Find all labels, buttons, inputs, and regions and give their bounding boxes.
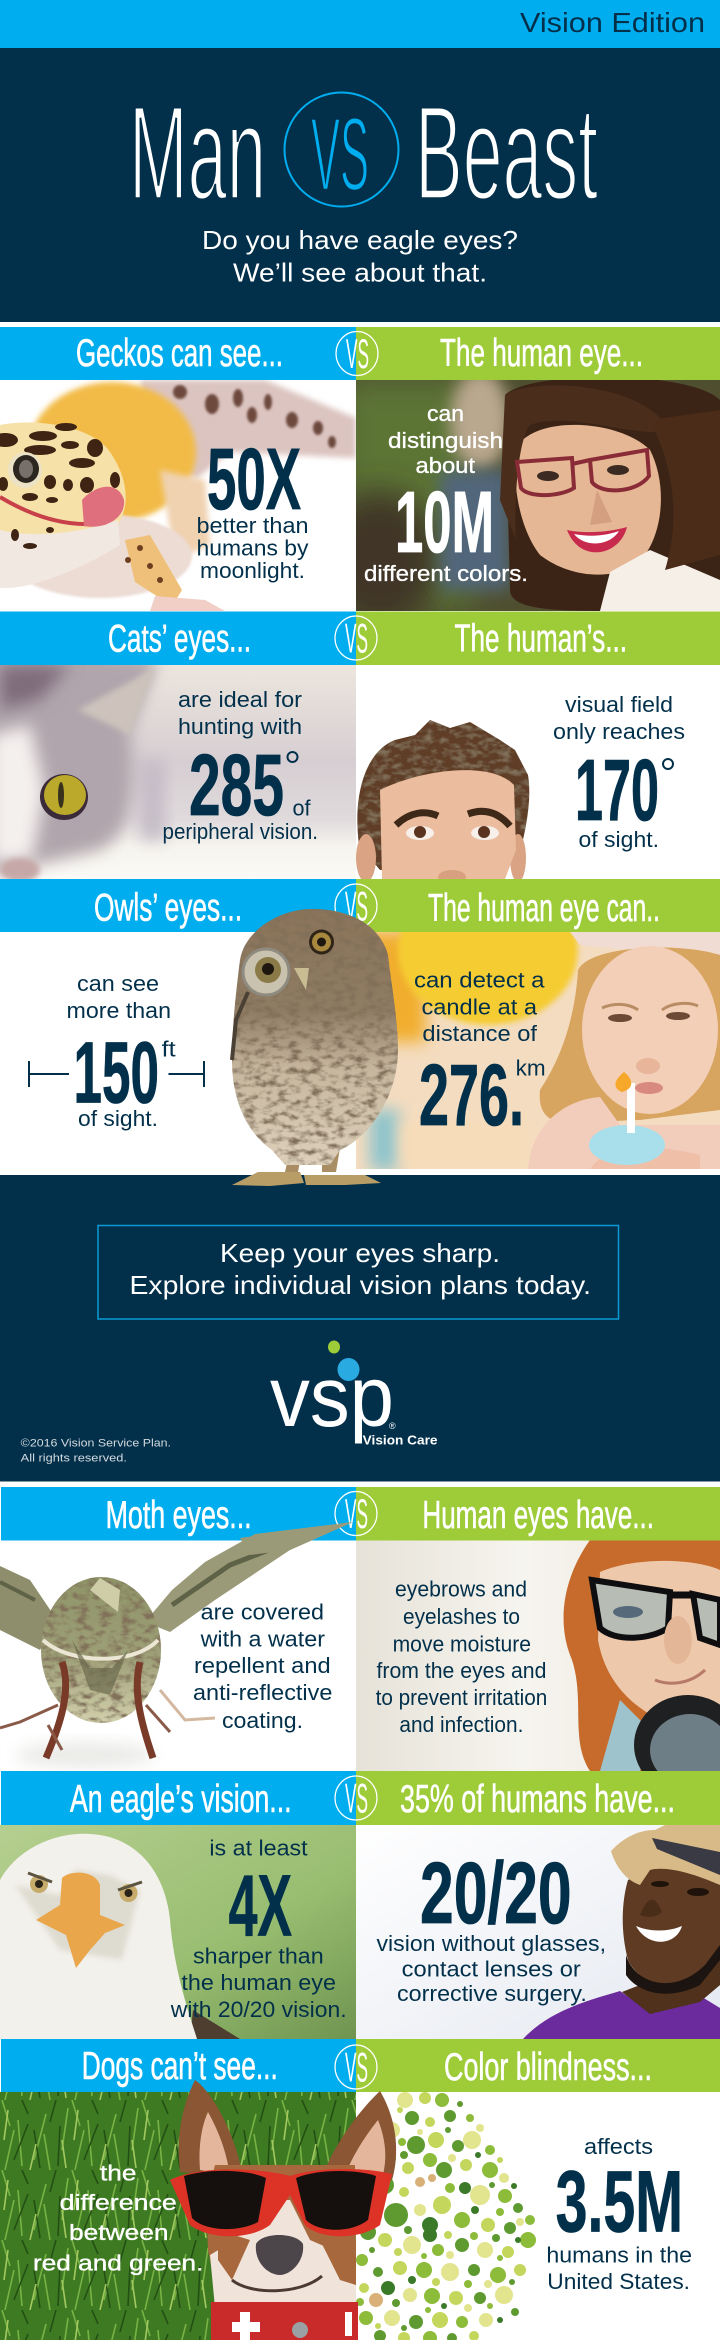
caption: human colour top: distinguish (388, 428, 503, 453)
header: dogs (1, 2039, 356, 2092)
illustration: woman with glasses (356, 380, 720, 611)
caption: eyebrows: eyebrows and (395, 1577, 527, 1602)
caption: 20/20: contact lenses or (402, 1956, 581, 1981)
stat: 285 degrees: 285 (189, 737, 284, 834)
logo: VSP: ® (389, 1421, 396, 1431)
stat: 276 km: 276. (419, 1047, 524, 1144)
caption: moth (193, 1600, 332, 1733)
vs badges (335, 330, 378, 2090)
caption: 20/20 (376, 1931, 606, 2006)
logo: VSP: Vision Care (363, 1432, 438, 1447)
caption: gecko (196, 513, 308, 583)
header: human eyes have (356, 1487, 720, 1540)
header: eagle: An eagle’s vision... (70, 1778, 292, 1821)
caption: 20/20: corrective surgery. (397, 1981, 587, 2006)
caption: human top: only reaches (553, 719, 685, 744)
header: owls: Owls’ eyes... (94, 887, 242, 930)
subtitle: Do you have eagle eyes? (202, 225, 518, 255)
caption: eagle top: is at least (209, 1835, 308, 1860)
header: human's: The human’s... (454, 618, 627, 661)
caption: human colour top (388, 401, 503, 478)
panel: human candle fact (356, 875, 720, 1170)
top bar (0, 0, 720, 48)
caption: dog: between (69, 2220, 168, 2245)
panel: call to action (0, 1175, 720, 1482)
caption: human top: visual field (565, 692, 673, 717)
caption: eyebrows: and infection. (399, 1712, 523, 1737)
caption: different colors: different colors. (364, 561, 528, 586)
caption: moth: anti-reflective (193, 1680, 332, 1705)
caption: eyebrows: from the eyes and (376, 1658, 546, 1683)
caption: gecko: humans by (196, 536, 308, 560)
vs badges: VS (346, 330, 369, 377)
callout box: Keep your eyes sharp. (220, 1238, 500, 1268)
stat: 4X: 4X (229, 1858, 292, 1955)
illustration: eagle (0, 1825, 356, 2039)
caption: affects: affects (584, 2134, 653, 2159)
caption: gecko: better than (196, 513, 308, 538)
stat: 20/20: 20/20 (420, 1845, 572, 1942)
caption: candle: candle at a (422, 994, 538, 1020)
illustration: cat (0, 650, 356, 882)
panel: human colour vision (356, 327, 720, 611)
caption: eagle bottom (170, 1944, 347, 2022)
illustration: man looking up (356, 720, 530, 879)
caption: humans in US (546, 2242, 692, 2294)
title: Man: Man (129, 79, 266, 228)
caption: humans in US: humans in the (546, 2242, 692, 2267)
header: owls (0, 879, 356, 932)
vs badges: VS (345, 614, 368, 662)
callout box: Explore individual vision plans today. (130, 1270, 591, 1300)
header: human's (356, 612, 720, 665)
caption: dog: red and green. (33, 2250, 203, 2276)
stat: 170 degrees: 170 (575, 742, 659, 839)
panel: moth facts (0, 1487, 356, 1767)
caption: owl bottom: of sight. (78, 1106, 158, 1131)
stat: 276 km: km (516, 1056, 546, 1081)
panel: color blindness fact (356, 2039, 720, 2340)
caption: cat top (178, 687, 302, 739)
caption: moth: coating. (222, 1708, 303, 1733)
caption: cat top: are ideal for (178, 687, 302, 712)
illustration: owl with monocle (232, 909, 398, 1186)
panel: owl facts (0, 879, 356, 1131)
caption: eyebrows (376, 1577, 547, 1737)
panel: 20/20 fact (356, 1771, 720, 2039)
caption: eyebrows: to prevent irritation (376, 1685, 547, 1710)
logo: VSP: vsp (270, 1350, 394, 1445)
stat: 10M: 10M (395, 474, 494, 571)
vs badges: VS (345, 1490, 368, 1537)
subtitle: We’ll see about that. (233, 258, 487, 288)
stat: 170 degrees (575, 742, 673, 839)
header: human eye (356, 327, 720, 380)
panel: gecko facts (0, 327, 356, 611)
caption: moth: with a water (200, 1626, 325, 1652)
caption: cat bottom: of (292, 796, 311, 820)
caption: human top (553, 692, 685, 744)
vs badge (284, 92, 398, 213)
caption: dog: the (100, 2161, 136, 2186)
caption: cat bottom (162, 796, 318, 844)
stat: 50X: 50X (207, 431, 301, 528)
illustration: color plate (356, 2092, 536, 2340)
copyright: All rights reserved. (21, 1453, 127, 1465)
header: geckos: Geckos can see... (76, 332, 283, 375)
panel: title banner (0, 48, 720, 322)
header: cats: Cats’ eyes... (108, 618, 251, 661)
panel: eagle facts (0, 1771, 356, 2039)
header: geckos (0, 327, 356, 380)
illustration: girl with candle (356, 932, 720, 1169)
illustration: moth wing tip (240, 1522, 353, 1555)
caption: moth: repellent and (194, 1653, 331, 1678)
callout box (98, 1226, 618, 1319)
caption: eagle bottom: with 20/20 vision. (170, 1997, 347, 2022)
panel: dog facts (0, 2039, 356, 2340)
illustration: grass background (0, 2092, 356, 2340)
caption: eyebrows: move moisture (393, 1631, 531, 1656)
illustration: dog in sunglasses (170, 2080, 396, 2340)
caption: candle: can detect a (414, 968, 545, 993)
header: moth (1, 1487, 356, 1540)
panel: human eyebrows fact (356, 1487, 720, 1795)
stat: 150 ft with measure bars: ft (162, 1036, 176, 1062)
header: moth: Moth eyes... (106, 1494, 252, 1537)
caption: candle (414, 968, 545, 1046)
header: color blindness (356, 2039, 720, 2092)
caption: 20/20: vision without glasses, (376, 1931, 606, 1956)
caption: gecko: moonlight. (200, 558, 305, 583)
panel: cat facts (0, 612, 356, 882)
stat: 150 ft with measure bars (29, 1024, 204, 1122)
stat: 150 ft with measure bars: 150 (74, 1024, 159, 1122)
header: human eye can (356, 879, 720, 932)
vs badges: VS (345, 1774, 368, 1822)
caption: candle: distance of (422, 1021, 538, 1046)
caption: of sight: of sight. (578, 827, 659, 852)
caption: eyebrows: eyelashes to (403, 1604, 520, 1629)
illustration: woman with magnifier (356, 1540, 720, 1795)
header: cats (0, 612, 356, 665)
caption: dog (33, 2161, 203, 2276)
copyright: ©2016 Vision Service Plan. (21, 1438, 171, 1450)
caption: humans in US: United States. (547, 2269, 690, 2294)
caption: dog: difference (60, 2190, 177, 2215)
header: dogs: Dogs can’t see... (82, 2045, 278, 2088)
edition label: Vision Edition (520, 7, 705, 38)
caption: human colour top: can (427, 401, 464, 426)
caption: owl top (66, 971, 171, 1023)
subtitle (202, 225, 518, 288)
illustration: gecko (0, 380, 356, 611)
header: eagle (1, 1771, 356, 1825)
vs badges: VS (345, 2044, 368, 2090)
caption: owl top: more than (66, 998, 171, 1023)
vs badges: VS (345, 882, 368, 930)
vs badge: VS (311, 97, 369, 213)
caption: human colour top: about (416, 453, 475, 478)
caption: eagle bottom: the human eye (181, 1970, 336, 1995)
caption: cat bottom: peripheral vision. (162, 819, 318, 844)
caption: owl top: can see (77, 971, 159, 996)
caption: eagle bottom: sharper than (193, 1944, 324, 1968)
caption: moth: are covered (201, 1600, 324, 1625)
caption: cat top: hunting with (178, 714, 302, 739)
copyright (21, 1438, 171, 1465)
illustration: moth (0, 1522, 353, 1767)
panel: human field of view (356, 612, 720, 884)
illustration: man in hat (356, 1825, 720, 2039)
